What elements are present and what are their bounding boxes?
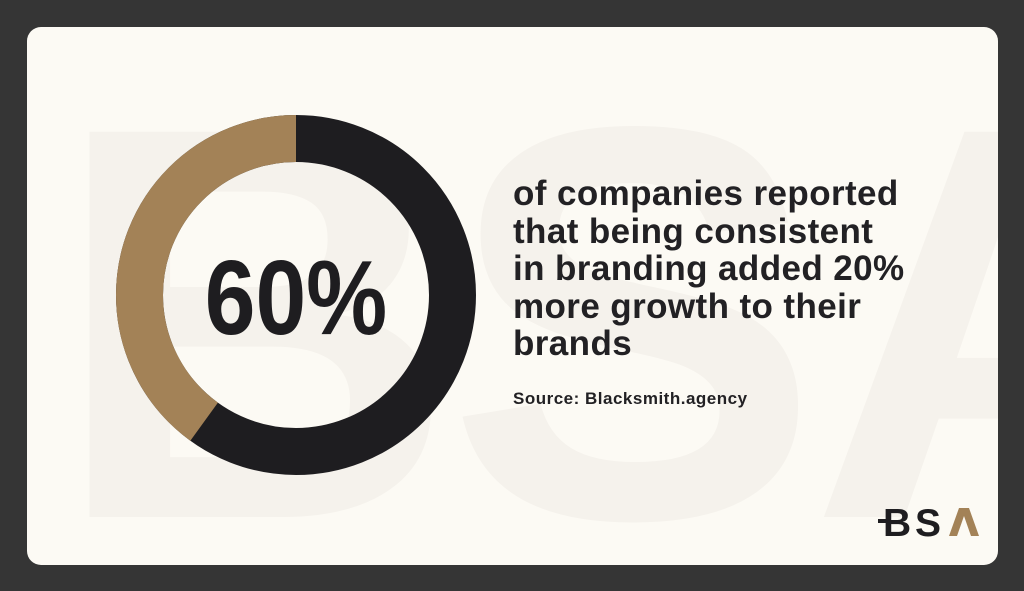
- statement text: [513, 174, 905, 363]
- statement text: of companies reported: [513, 174, 899, 213]
- donut chart: 60%: [205, 239, 387, 357]
- donut chart: [116, 115, 476, 475]
- statement text: that being consistent: [513, 212, 873, 250]
- source: Source: Blacksmith.agency: [513, 389, 748, 408]
- statement text: in branding added 20%: [513, 249, 905, 288]
- statement text: brands: [513, 324, 632, 363]
- statement text: more growth to their: [513, 286, 861, 326]
- logo BSA: [878, 502, 979, 540]
